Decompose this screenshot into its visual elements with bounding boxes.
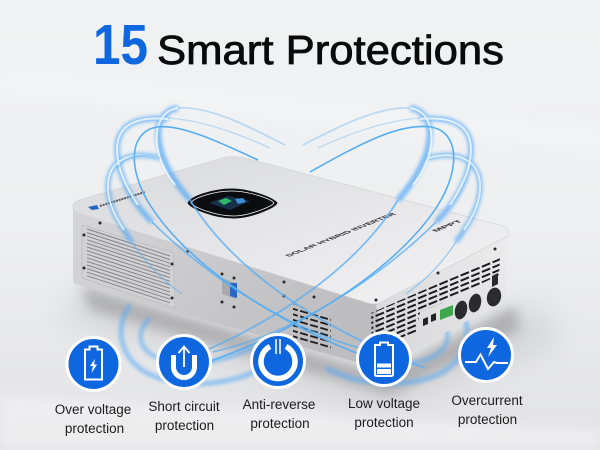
screws	[82, 222, 496, 308]
brand mark	[88, 192, 145, 210]
network ports	[423, 313, 436, 326]
icon: battery bolt	[67, 338, 120, 390]
rear ports	[423, 273, 503, 326]
protection: over voltage	[55, 338, 131, 436]
front air vent	[371, 258, 500, 338]
protection: short circuit: protection	[155, 418, 214, 433]
label: Anti-reverse	[243, 397, 315, 412]
left side face	[73, 208, 385, 370]
protection: overcurrent: protection	[458, 412, 517, 427]
lower energy loops behind device	[121, 305, 467, 384]
control screen	[188, 189, 277, 218]
right side face	[376, 236, 508, 363]
protection: anti-reverse: protection	[250, 416, 310, 431]
title	[93, 13, 504, 77]
energy rings left	[108, 108, 425, 372]
product name: SOLAR HYBRID INVERTER	[283, 212, 399, 257]
icon: low battery	[358, 332, 410, 386]
side port panel	[222, 278, 237, 299]
green terminal	[440, 305, 453, 320]
label: Short circuit	[148, 399, 220, 414]
inverter device	[73, 156, 508, 370]
icon: current spike	[460, 328, 512, 382]
MPPT badge: MPPT	[430, 219, 465, 232]
protection: anti-reverse	[243, 334, 315, 431]
icon: power	[252, 334, 304, 388]
centre air vent	[293, 304, 331, 352]
label: Low voltage	[348, 396, 420, 411]
power switch	[492, 273, 498, 287]
title words: Smart Protections	[157, 27, 504, 73]
protection: over voltage: protection	[65, 421, 124, 436]
protection: short circuit	[148, 336, 220, 433]
round sockets	[453, 299, 469, 321]
protection: low voltage: protection	[354, 415, 414, 430]
energy rings right	[163, 108, 480, 372]
icon: u-turn arrow	[158, 336, 210, 388]
label: Overcurrent	[451, 393, 523, 408]
protection: low voltage	[348, 332, 420, 430]
protection: overcurrent	[451, 328, 523, 427]
device shadow	[80, 285, 520, 395]
side air vent	[82, 225, 175, 308]
top face	[73, 156, 508, 304]
title number: 15	[93, 13, 148, 77]
label: Over voltage	[55, 402, 131, 417]
